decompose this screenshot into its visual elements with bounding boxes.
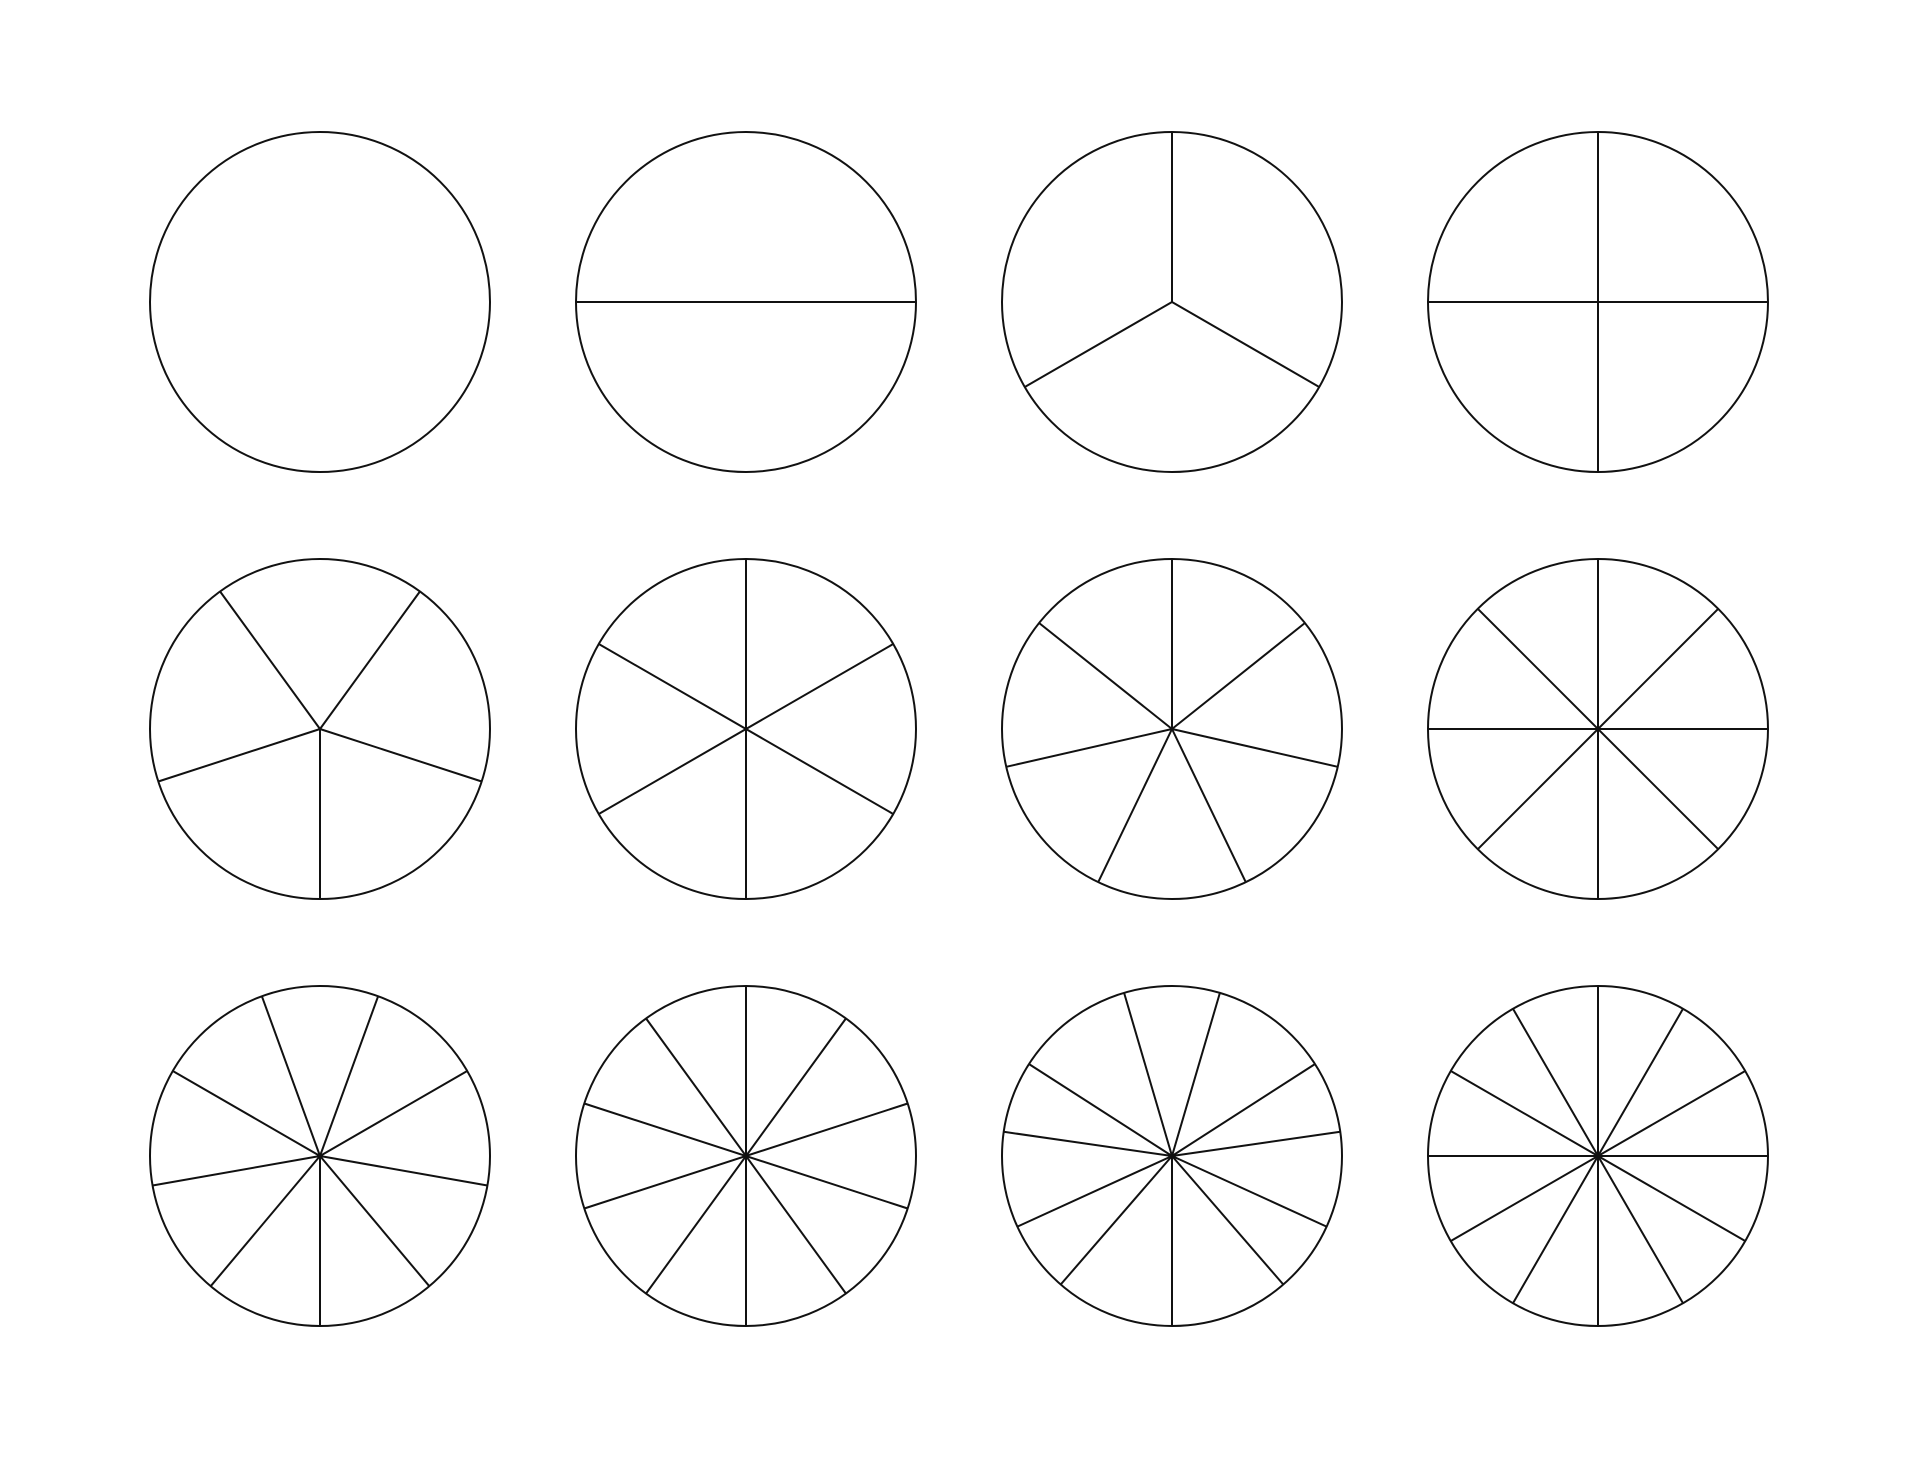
circle: 4 parts: [1428, 132, 1768, 472]
circle: 9 parts: [150, 986, 490, 1326]
circle: 10 parts: [576, 986, 916, 1326]
circle: 8 parts: [1428, 559, 1768, 899]
circle: 2 parts: [576, 132, 916, 472]
circle: 1 part: [150, 132, 490, 472]
circle: 11 parts: [1002, 986, 1342, 1326]
circle: 6 parts: [576, 559, 916, 899]
circle: 7 parts: [1002, 559, 1342, 899]
circle: 12 parts: [1428, 986, 1768, 1326]
circle: 3 parts: [1002, 132, 1342, 472]
circle: 5 parts: [150, 559, 490, 899]
